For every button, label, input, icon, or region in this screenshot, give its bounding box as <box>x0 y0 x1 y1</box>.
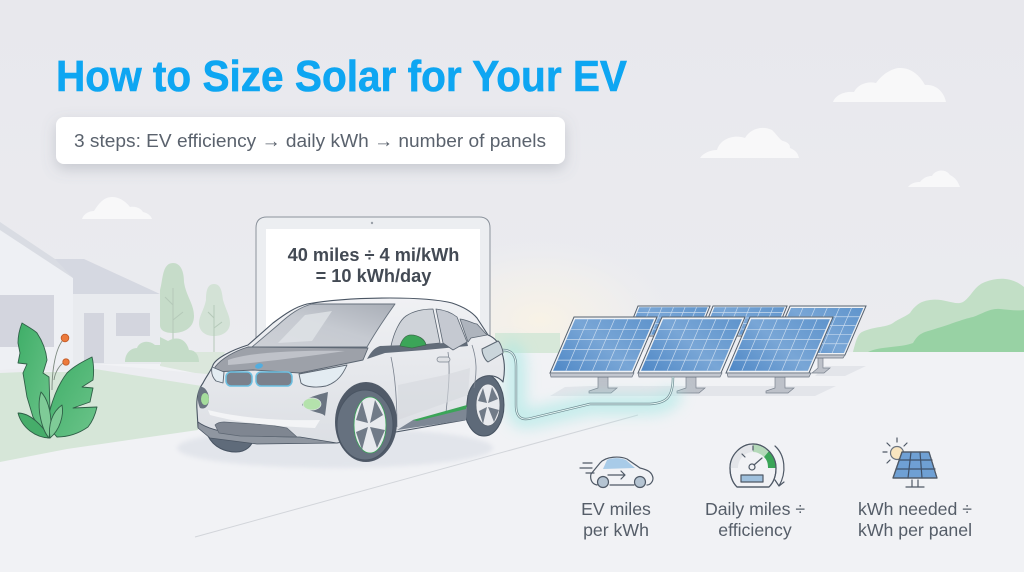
light hill <box>853 279 1024 352</box>
front side window <box>391 309 440 346</box>
panel: front left <box>550 317 657 373</box>
solar panel array <box>550 306 866 396</box>
charging cable <box>503 350 673 419</box>
back row stand <box>812 358 830 373</box>
label: kWh per panel: kWh per panel <box>858 520 972 540</box>
door panel lines <box>391 345 476 427</box>
front far tire <box>208 436 254 452</box>
house large window <box>0 295 54 347</box>
tree near <box>160 263 194 333</box>
monitor camera <box>371 222 373 224</box>
title: How to Size Solar for Your EV <box>56 52 628 101</box>
right fog light <box>303 398 321 410</box>
formula line 1: 40 miles ÷ 4 mi/kWh <box>288 245 459 265</box>
cloud: middle right <box>700 128 799 158</box>
house main gable <box>0 230 73 372</box>
bumper highlight <box>208 410 320 428</box>
panel: back middle <box>701 306 787 336</box>
warm sun glow <box>410 240 670 400</box>
charging plug <box>482 341 503 362</box>
panel: back right <box>769 306 866 355</box>
side sill green <box>413 405 467 421</box>
subtitle text: 3 steps: EV efficiency → daily kWh → number of panels <box>74 130 546 151</box>
tree far <box>199 284 230 336</box>
formula line 2: = 10 kWh/day <box>316 266 432 286</box>
flower top <box>61 334 69 342</box>
bush <box>125 337 199 362</box>
car body <box>197 298 504 443</box>
ground road <box>0 352 1024 572</box>
panel: back left <box>626 306 710 336</box>
left headlight <box>212 367 224 383</box>
ground shadow <box>550 386 836 396</box>
center right leaf <box>50 405 62 438</box>
house door <box>84 313 104 363</box>
dark strip under windows <box>367 342 468 359</box>
label: EV miles: EV miles <box>581 499 651 519</box>
left large leaf <box>18 323 50 438</box>
rear side window <box>436 309 467 350</box>
panel: front middle <box>638 317 745 373</box>
front rim spokes <box>356 400 385 450</box>
dark hill <box>868 309 1024 352</box>
label: Daily miles: Daily miles ÷ <box>705 499 805 519</box>
flower lower <box>63 359 69 365</box>
door handle <box>437 357 450 362</box>
electric car <box>197 298 504 462</box>
step 3: kWh needed divided by kWh per panel <box>858 438 972 540</box>
house <box>0 222 161 372</box>
lawn <box>0 368 205 462</box>
house wing wall <box>73 294 161 364</box>
monitor frame <box>256 217 490 345</box>
stand 2 <box>677 377 705 393</box>
front tire <box>337 390 393 460</box>
icon: gauge <box>730 444 784 487</box>
rear rim spokes <box>478 387 499 424</box>
cable glow <box>505 350 673 419</box>
right headlight <box>299 365 347 387</box>
front left frame <box>550 373 634 377</box>
house wing roof <box>55 259 160 294</box>
left fog pocket <box>198 387 209 409</box>
windshield reflection <box>278 311 332 343</box>
hood <box>215 347 368 373</box>
cloud: left <box>82 197 152 219</box>
cable inner <box>503 350 673 419</box>
far green strip <box>495 333 560 353</box>
front middle frame <box>638 373 722 377</box>
back row shadow <box>815 366 866 376</box>
stand 3 <box>766 377 794 393</box>
right grille <box>256 372 292 386</box>
right fog pocket <box>302 392 328 416</box>
label: per kWh: per kWh <box>583 520 649 540</box>
front rim <box>354 397 386 453</box>
back right panel frame <box>769 355 845 358</box>
front right frame <box>727 373 811 377</box>
trees and bush <box>125 263 230 362</box>
lower left leaf <box>18 413 50 438</box>
lower front bumper band <box>198 422 337 444</box>
car shadow <box>177 428 493 468</box>
monitor screen <box>266 229 480 345</box>
subtitle background <box>56 117 565 164</box>
windshield <box>252 304 395 347</box>
monitor card with formula <box>256 217 490 345</box>
side sill dark <box>397 407 467 430</box>
step 1: EV miles per kWh <box>580 457 653 540</box>
stand 1 <box>589 377 617 393</box>
plant stems <box>52 340 65 390</box>
side body shading <box>398 368 470 420</box>
cable outer <box>503 350 673 419</box>
lower grille <box>215 422 297 437</box>
rear quarter window <box>460 319 487 342</box>
subtitle pill <box>56 117 565 164</box>
side mirror <box>400 335 426 348</box>
hills right <box>853 279 1024 352</box>
left fog light <box>201 393 209 405</box>
center left leaf <box>39 392 51 438</box>
label: efficiency: efficiency <box>718 520 792 540</box>
tree trunks <box>165 288 222 352</box>
left grille <box>226 372 252 386</box>
road edge line <box>195 415 638 537</box>
green band behind bush <box>160 352 225 377</box>
wheel arch front <box>335 382 397 462</box>
rear tire <box>464 374 504 436</box>
blue badge <box>254 362 264 370</box>
driveway strip <box>0 364 218 387</box>
house roof edge <box>0 222 73 278</box>
label: kWh needed: kWh needed ÷ <box>858 499 972 519</box>
cloud: top right <box>833 68 946 102</box>
cloud: small right <box>908 171 960 187</box>
right large leaf <box>49 357 97 437</box>
hood highlight <box>228 351 345 365</box>
step 2: daily miles divided by efficiency <box>705 444 805 540</box>
icon: car <box>580 457 653 488</box>
plant <box>18 323 97 438</box>
icon: sun and solar panel <box>883 438 937 487</box>
panel: front right <box>726 317 833 373</box>
rear rim <box>476 384 500 426</box>
house window <box>116 313 150 336</box>
